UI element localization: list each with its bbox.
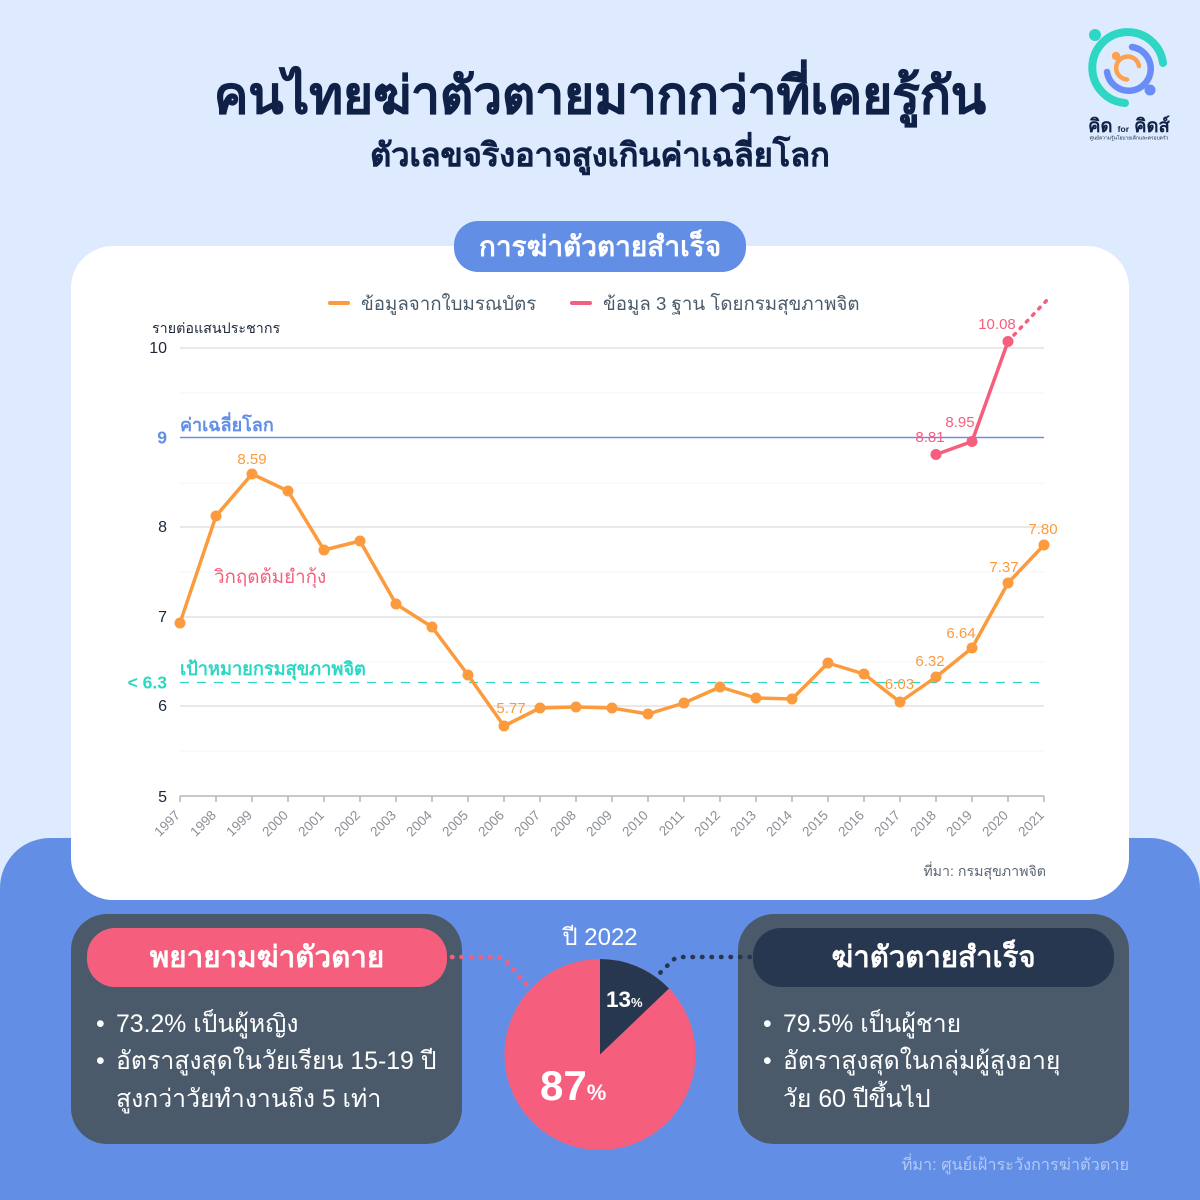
y axis labels: 10 xyxy=(149,340,167,357)
attempted suicide facts: • xyxy=(96,1011,105,1038)
x axis labels: 1998 xyxy=(187,808,219,839)
bottom source: ที่มา: ศูนย์เฝ้าระวังการฆ่าตัวตาย xyxy=(902,1156,1129,1174)
heading pill: completed suicide xyxy=(454,221,746,272)
pink series: three-source data xyxy=(915,299,1048,460)
legend: ข้อมูล 3 ฐาน โดยกรมสุขภาพจิต xyxy=(603,293,860,316)
heading pill: completed suicide: การฆ่าตัวตายสำเร็จ xyxy=(479,231,721,262)
x axis labels: 2001 xyxy=(295,808,327,839)
completed suicide facts xyxy=(763,1009,1060,1113)
subtitle: ตัวเลขจริงอาจสูงเกินค่าเฉลี่ยโลก xyxy=(370,137,830,173)
y axis labels xyxy=(149,340,167,806)
legend: ข้อมูลจากใบมรณบัตร xyxy=(361,293,536,315)
attempted suicide facts: 73.2% เป็นผู้หญิง xyxy=(116,1011,298,1038)
x axis labels: 2004 xyxy=(403,807,435,839)
line chart xyxy=(128,293,1058,880)
orange series: death certificates xyxy=(174,451,1058,732)
logo xyxy=(1088,28,1171,142)
orange series: death certificates: 8.59 xyxy=(237,451,267,468)
x axis labels: 2015 xyxy=(799,808,831,839)
x axis labels: 2010 xyxy=(619,808,651,839)
pie chart: 13% xyxy=(606,987,643,1012)
heading: attempted suicide xyxy=(87,928,447,987)
heading: completed suicide: ฆ่าตัวตายสำเร็จ xyxy=(831,941,1036,974)
orange series: death certificates: 6.03 xyxy=(885,676,914,693)
y axis title: รายต่อแสนประชากร xyxy=(152,321,280,337)
y axis labels: 5 xyxy=(158,789,167,806)
world average line: 9 xyxy=(157,428,167,448)
x axis labels: 2008 xyxy=(547,808,579,839)
logo: คิด for คิดส์ xyxy=(1088,115,1171,136)
completed suicide facts: อัตราสูงสุดในกลุ่มผู้สูงอายุ xyxy=(783,1048,1060,1075)
completed suicide facts: วัย 60 ปีขึ้นไป xyxy=(783,1086,931,1113)
annotation: Tom Yum Kung crisis: วิกฤตต้มยำกุ้ง xyxy=(214,566,326,589)
x axis labels: 2020 xyxy=(979,808,1011,839)
x axis labels: 2016 xyxy=(835,808,867,839)
x axis labels: 2011 xyxy=(656,808,687,839)
y axis labels: 6 xyxy=(158,698,167,715)
target line xyxy=(128,659,1044,692)
attempted suicide facts: อัตราสูงสุดในวัยเรียน 15-19 ปี xyxy=(116,1048,436,1075)
x axis labels: 2006 xyxy=(475,808,507,839)
attempted suicide facts: • xyxy=(96,1048,105,1075)
orange series: death certificates: 6.32 xyxy=(915,653,945,670)
target line: เป้าหมายกรมสุขภาพจิต xyxy=(180,659,366,681)
orange series: death certificates: 7.37 xyxy=(989,559,1019,576)
heading: completed suicide xyxy=(753,928,1114,987)
panel: attempted suicide xyxy=(71,914,462,1144)
logo: ศูนย์ความรู้นโยบายเด็กและครอบครัว xyxy=(1090,134,1169,142)
x axis labels: 2007 xyxy=(511,808,543,839)
x axis labels: 2013 xyxy=(727,808,759,839)
x axis labels: 2017 xyxy=(871,808,903,839)
attempted suicide facts xyxy=(96,1009,436,1114)
x axis labels: 2021 xyxy=(1015,808,1047,839)
target line: < 6.3 xyxy=(128,672,167,692)
x axis labels: 2009 xyxy=(583,808,615,839)
x axis labels: 2012 xyxy=(691,808,723,839)
y axis labels: 8 xyxy=(158,519,167,536)
pink series: three-source data: 8.95 xyxy=(945,414,975,431)
orange series: death certificates: 7.80 xyxy=(1028,521,1058,538)
world average line xyxy=(157,412,1044,448)
completed suicide facts: 79.5% เป็นผู้ชาย xyxy=(783,1011,961,1038)
pie chart: ปี 2022 xyxy=(561,924,638,951)
orange series: death certificates: 5.77 xyxy=(496,700,526,717)
pie chart xyxy=(450,924,752,1150)
orange series: death certificates: 6.64 xyxy=(946,625,976,642)
completed suicide facts: • xyxy=(763,1011,772,1038)
x axis labels: 1997 xyxy=(151,808,183,839)
legend xyxy=(328,293,860,316)
x axis labels: 1999 xyxy=(223,808,255,839)
x axis labels: 2019 xyxy=(943,808,975,839)
panel: completed suicide xyxy=(738,914,1129,1144)
pink series: three-source data: 8.81 xyxy=(915,429,945,446)
x axis xyxy=(180,796,1044,802)
x axis labels: 2003 xyxy=(367,808,399,839)
x axis labels: 2014 xyxy=(763,807,795,839)
completed suicide facts: • xyxy=(763,1048,772,1075)
x axis labels: 2005 xyxy=(439,808,471,839)
pie chart: 87% xyxy=(540,1062,606,1109)
x axis labels: 2018 xyxy=(907,808,939,839)
x axis labels: 2002 xyxy=(331,808,363,839)
pink series: three-source data: 10.08 xyxy=(978,316,1016,333)
attempted suicide facts: สูงกว่าวัยทำงานถึง 5 เท่า xyxy=(116,1086,381,1113)
bottom blue band xyxy=(0,838,1200,1200)
y axis labels: 7 xyxy=(158,609,167,626)
icon: logo mark xyxy=(1089,29,1163,103)
world average line: ค่าเฉลี่ยโลก xyxy=(180,412,274,435)
chart source: ที่มา: กรมสุขภาพจิต xyxy=(923,861,1046,880)
x axis labels xyxy=(151,807,1047,839)
panel: chart card xyxy=(71,246,1129,900)
x axis labels: 2000 xyxy=(259,808,291,839)
title: คนไทยฆ่าตัวตายมากกว่าที่เคยรู้กัน xyxy=(214,67,986,124)
heading: attempted suicide: พยายามฆ่าตัวตาย xyxy=(150,941,384,974)
